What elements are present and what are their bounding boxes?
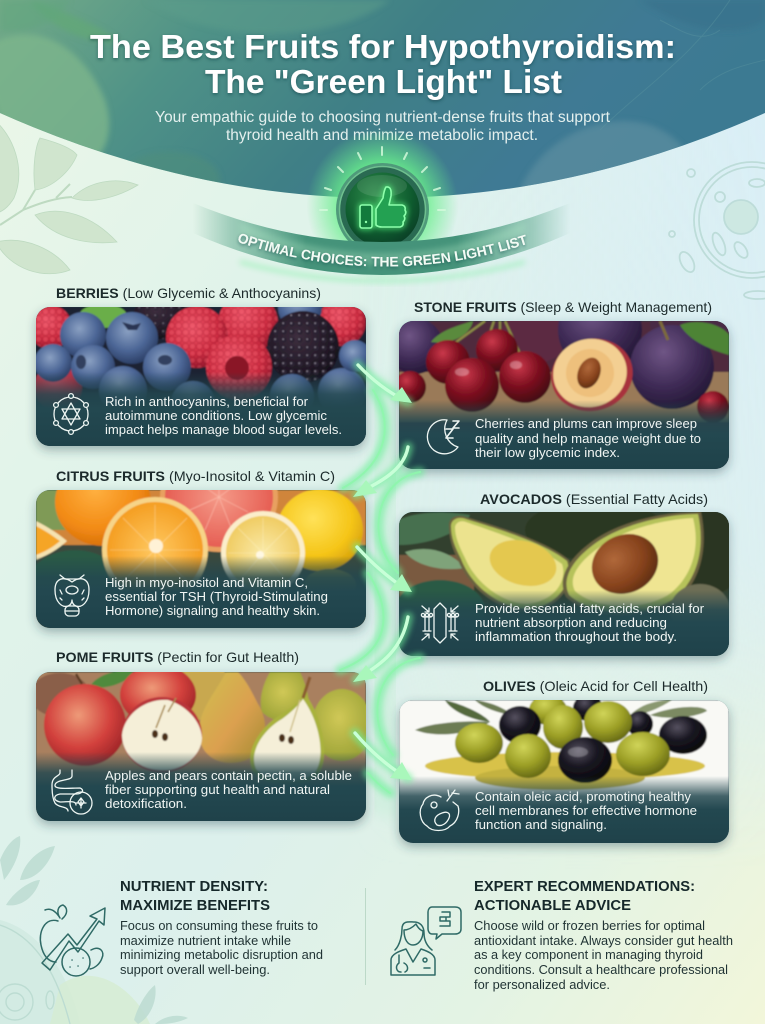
- text block: pome fruits: [105, 768, 352, 811]
- ribbon: optimal choices: OPTIMAL CHOICES: THE GREEN LIGHT LIST: [236, 234, 527, 270]
- icon: intestines: [52, 770, 92, 814]
- panel: berries: [28, 285, 371, 446]
- text block: stone fruits: quality and help manage weight due to: [475, 431, 701, 446]
- icon: thyroid gland: [55, 575, 89, 616]
- text block: citrus fruits: essential for TSH (Thyroid-Stimulating: [105, 589, 328, 604]
- text block: avocados: Provide essential fatty acids, crucial for: [475, 601, 705, 616]
- subtitle: [155, 109, 611, 144]
- icon: anthocyanin molecule: [54, 394, 88, 434]
- text block: pome fruits: detoxification.: [105, 796, 187, 811]
- text block: pome fruits: Apples and pears contain pectin, a soluble: [105, 768, 352, 783]
- text block: berries: [105, 394, 342, 437]
- card: berries: [28, 286, 371, 446]
- heading: olives: OLIVES (Oleic Acid for Cell Health): [483, 678, 708, 694]
- text block: expert recommendations: for personalized advice.: [474, 978, 610, 992]
- text block: pome fruits: fiber supporting gut health and natural: [105, 782, 330, 797]
- subtitle: Your empathic guide to choosing nutrient-dense fruits that support: [155, 109, 611, 126]
- panel: olives: [399, 678, 729, 843]
- text block: nutrient density: maximize nutrient intake while: [120, 934, 291, 948]
- text block: berries: Rich in anthocyanins, beneficial for: [105, 394, 309, 409]
- text block: olives: Contain oleic acid, promoting healthy: [475, 789, 691, 804]
- text block: avocados: inflammation throughout the body.: [475, 629, 677, 644]
- heading: citrus fruits: CITRUS FRUITS (Myo-Inositol & Vitamin C): [56, 468, 335, 484]
- header decorative fruit silhouettes: [0, 1, 682, 186]
- text block: olives: [475, 789, 697, 832]
- header banner: [0, 0, 765, 210]
- title: The Best Fruits for Hypothyroidism:: [90, 28, 676, 65]
- text block: expert recommendations: [474, 919, 733, 992]
- text block: nutrient density: support overall well-being.: [120, 963, 270, 977]
- panel: stone fruits: [387, 288, 730, 469]
- text block: berries: impact helps manage blood sugar levels.: [105, 422, 342, 437]
- heading: nutrient density: [120, 879, 270, 914]
- panel: nutrient density: [40, 879, 323, 977]
- card: olives: [399, 695, 729, 843]
- decorative cell top right: [669, 162, 765, 299]
- icon: moon and zzz: [427, 420, 459, 454]
- heading: nutrient density: MAXIMIZE BENEFITS: [120, 898, 270, 914]
- text block: citrus fruits: High in myo-inositol and Vitamin C,: [105, 575, 308, 590]
- title: [90, 28, 676, 100]
- halo behind flow connectors: [379, 380, 392, 815]
- icon: doctor with speech bubble: [391, 907, 461, 975]
- heading: expert recommendations: [474, 879, 695, 914]
- card: citrus fruits: [30, 488, 372, 638]
- text block: expert recommendations: conditions. Consult a healthcare professional: [474, 963, 728, 977]
- panel: expert recommendations: [391, 879, 733, 992]
- text block: nutrient density: [120, 919, 323, 977]
- decorative bottom left foliage and cell: [0, 836, 188, 1024]
- heading: berries: BERRIES (Low Glycemic & Anthocyanins): [56, 285, 321, 301]
- text block: nutrient density: minimizing metabolic disruption and: [120, 948, 323, 962]
- panel: avocados: [395, 491, 746, 656]
- icon: healthy cell: [420, 790, 459, 830]
- icon: fruit with rising arrow: [40, 905, 105, 976]
- text block: expert recommendations: as a key component in managing thyroid: [474, 948, 703, 962]
- heading: pome fruits: POME FRUITS (Pectin for Gut Health): [56, 649, 299, 665]
- text block: citrus fruits: [105, 575, 328, 618]
- text block: expert recommendations: Choose wild or frozen berries for optimal: [474, 919, 705, 933]
- text block: olives: function and signaling.: [475, 817, 607, 832]
- text block: avocados: [475, 601, 705, 644]
- card: pome fruits: [30, 660, 372, 821]
- heading: expert recommendations: ACTIONABLE ADVICE: [474, 898, 631, 914]
- panel: citrus fruits: [25, 442, 366, 630]
- subtitle: thyroid health and minimize metabolic impact.: [226, 127, 538, 144]
- heading: expert recommendations: EXPERT RECOMMENDATIONS:: [474, 879, 695, 895]
- text block: olives: cell membranes for effective hormone: [475, 803, 697, 818]
- panel: pome fruits: [30, 649, 372, 821]
- heading: avocados: AVOCADOS (Essential Fatty Acids): [480, 491, 708, 507]
- text block: nutrient density: Focus on consuming these fruits to: [120, 919, 318, 933]
- heading: nutrient density: NUTRIENT DENSITY:: [120, 879, 268, 895]
- text block: stone fruits: their low glycemic index.: [475, 445, 620, 460]
- text block: stone fruits: Cherries and plums can improve sleep: [475, 416, 697, 431]
- ribbon: optimal choices: [198, 205, 566, 286]
- text block: stone fruits: [475, 416, 701, 460]
- text block: avocados: nutrient absorption and reducing: [475, 615, 667, 630]
- icon: cell membrane with arrows: [421, 603, 459, 643]
- decorative leaves top left: [0, 118, 138, 274]
- title: The "Green Light" List: [205, 63, 562, 100]
- card: avocados: [395, 500, 746, 656]
- divider: [364, 888, 366, 985]
- text block: berries: autoimmune conditions. Low glycemic: [105, 408, 328, 423]
- heading: stone fruits: STONE FRUITS (Sleep & Weight Management): [414, 299, 712, 315]
- text block: expert recommendations: antioxidant intake. Always consider gut health: [474, 934, 733, 948]
- icon: glowing thumbs-up badge: [306, 129, 458, 281]
- card: stone fruits: [392, 318, 736, 480]
- text block: citrus fruits: Hormone) signaling and healthy skin.: [105, 603, 320, 618]
- arrows: glowing green flow connectors: [340, 365, 420, 793]
